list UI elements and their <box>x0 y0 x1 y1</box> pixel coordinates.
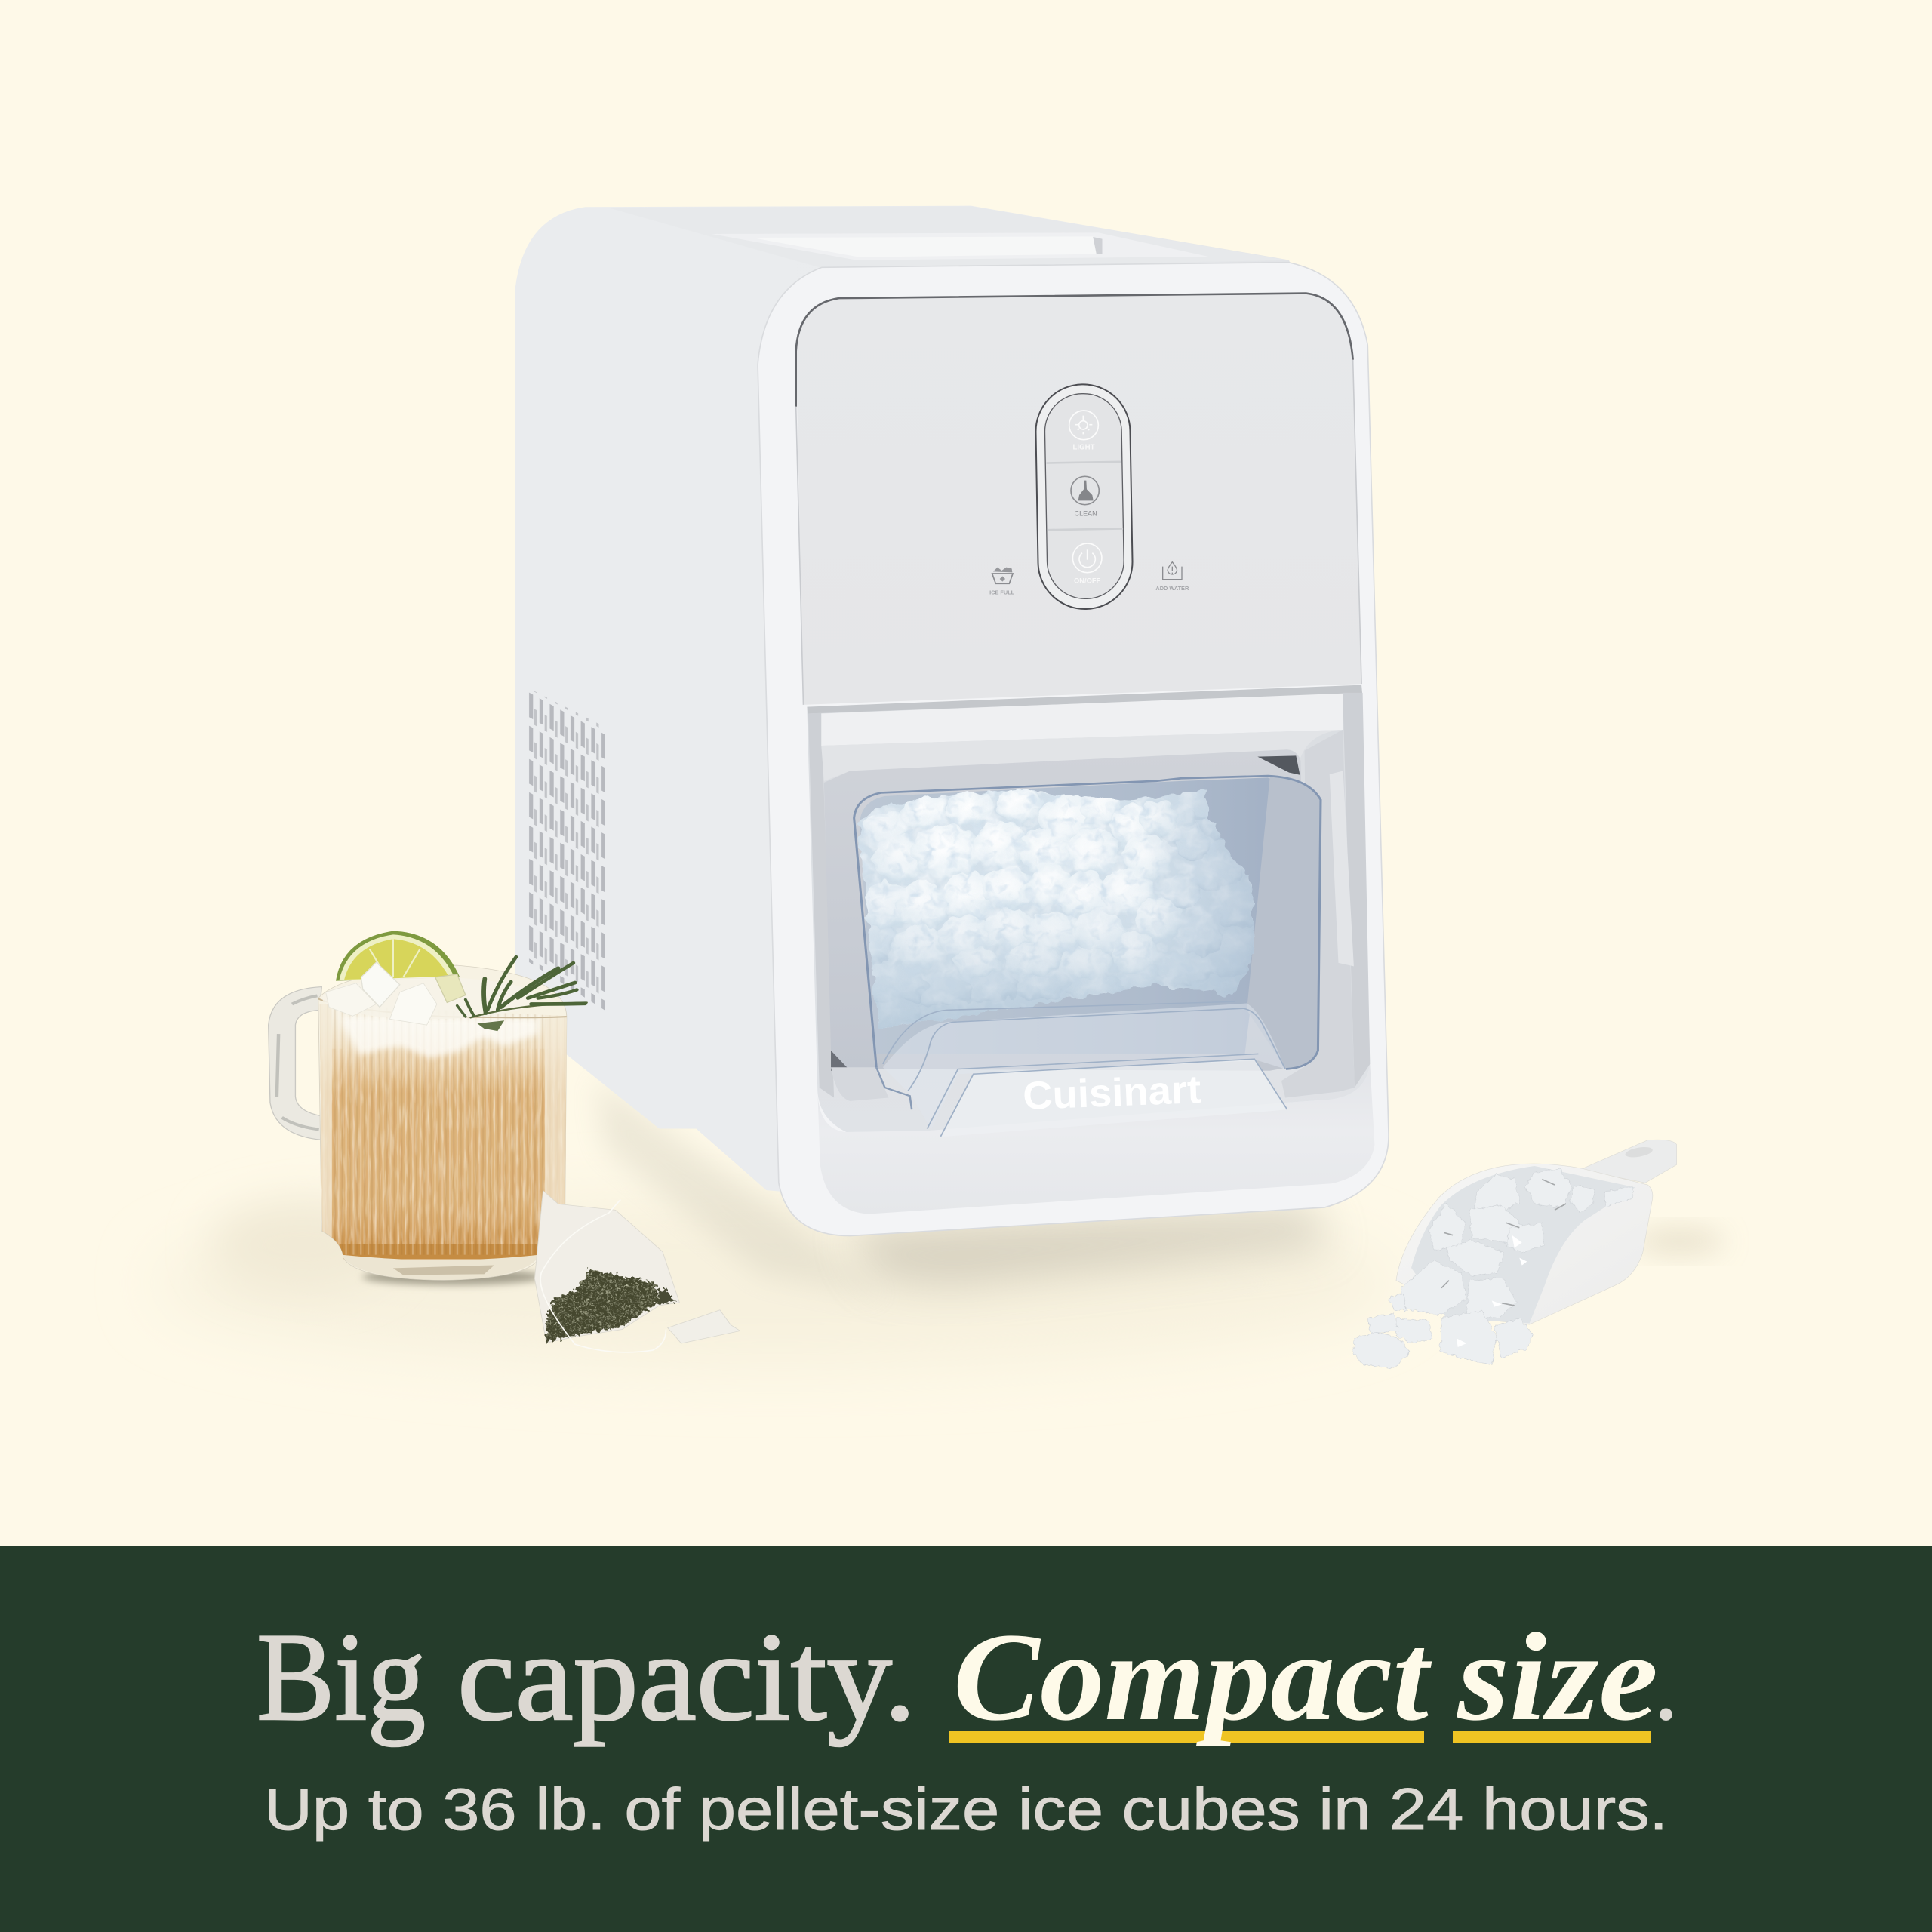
glass top strip <box>807 685 1362 714</box>
right bin wall <box>1247 777 1321 1069</box>
headline: big: Big <box>257 1607 426 1747</box>
control panel <box>989 383 1189 610</box>
mug glass body <box>318 965 567 1280</box>
headline: period: . <box>1653 1626 1679 1743</box>
tea liquid and ribs <box>318 995 568 1280</box>
bin back <box>860 777 1275 1054</box>
logo plate outline <box>940 1059 1287 1137</box>
icon: power button <box>1072 543 1102 584</box>
upper lid panel <box>796 294 1361 705</box>
window surround <box>807 687 1370 1132</box>
icon: light button: LIGHT <box>1073 444 1095 452</box>
ice maker machine <box>515 206 1389 1236</box>
headline: capacity: capacity. <box>457 1607 916 1747</box>
headline: size: size <box>1457 1607 1658 1747</box>
rim shading <box>318 998 567 1017</box>
bin outline <box>854 776 1321 1069</box>
mug with iced tea <box>269 931 587 1280</box>
handle highlights <box>277 995 319 1130</box>
ice window and bin <box>807 685 1374 1214</box>
bin left foot <box>876 1067 912 1109</box>
tray lower outer <box>831 1067 889 1101</box>
front frame <box>758 263 1389 1236</box>
mug handle <box>269 987 321 1140</box>
machine side body <box>515 206 1306 1192</box>
spout lines <box>883 1001 1285 1129</box>
ice pile <box>851 784 1262 1034</box>
yellow underlines <box>949 1731 1651 1743</box>
icon: ice full: ICE FULL <box>989 589 1015 595</box>
tea bag mesh <box>534 1191 679 1343</box>
machine top face and water lid <box>608 206 1289 268</box>
side vent grille <box>528 688 605 1011</box>
icon: clean button: CLEAN <box>1075 509 1097 517</box>
icon: add water: ADD WATER <box>1155 585 1189 592</box>
icon: clean button <box>1071 476 1099 517</box>
tea bag tag <box>668 1310 740 1343</box>
dark notch <box>1257 755 1300 775</box>
scoop interior <box>1411 1166 1635 1323</box>
scoop body <box>1396 1164 1653 1324</box>
spout clear lip <box>883 1003 1285 1130</box>
subheading: Up to 36 lb. of pellet-size ice cubes in 24 hours. <box>264 1776 1668 1842</box>
handle hole <box>1625 1146 1654 1159</box>
ice highlights <box>1457 1235 1527 1347</box>
right glass wall <box>1281 730 1355 1097</box>
hood band <box>821 694 1343 781</box>
ice specks <box>1441 1180 1566 1306</box>
icon: light button <box>1069 411 1098 452</box>
lime slice <box>336 931 460 981</box>
glass side strips <box>808 693 1370 1097</box>
tray shell <box>824 749 1306 1071</box>
scoop handle <box>1580 1140 1677 1183</box>
crushed ice on top <box>322 962 538 1025</box>
lower tray <box>817 1064 1374 1214</box>
ice scoop <box>1353 1140 1677 1368</box>
icon: power button: ON/OFF <box>1074 577 1101 584</box>
bottom band <box>0 1546 1932 1932</box>
tea bag string <box>540 1199 666 1352</box>
scooped ice <box>1353 1170 1632 1368</box>
floor shadows <box>158 1079 1724 1366</box>
button pill <box>1035 383 1134 610</box>
brand logo: Cuisinart <box>1022 1068 1201 1118</box>
logo plate <box>940 1059 1287 1137</box>
headline: compact: Compact <box>953 1607 1432 1747</box>
icon: ice full <box>989 568 1015 595</box>
tea leaves <box>546 1269 676 1342</box>
rosemary sprig <box>457 957 587 1031</box>
icon: add water <box>1155 562 1189 592</box>
tea bag <box>534 1191 740 1352</box>
